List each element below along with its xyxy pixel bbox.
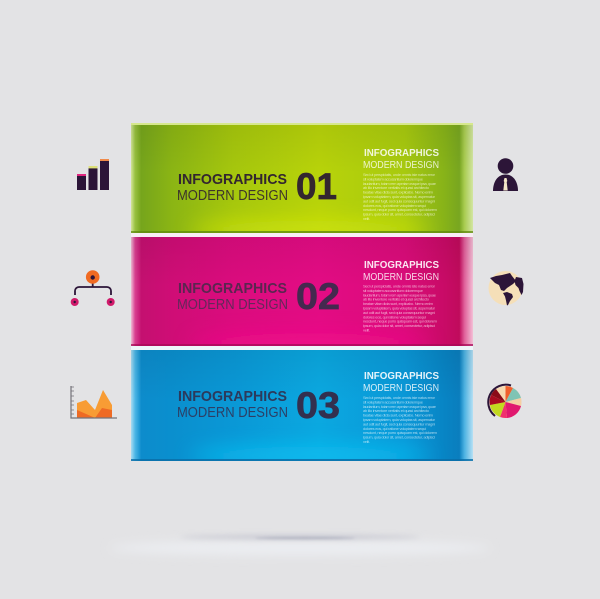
number 03: 03 <box>296 385 340 426</box>
body text 01: beatae vitae dicta sunt, explicabo. Nemo enim <box>363 190 434 195</box>
panel: green band 01 <box>131 123 473 240</box>
icon: network nodes <box>71 270 115 306</box>
body text 03 <box>363 395 438 444</box>
icon: businessman <box>493 158 518 191</box>
body text 02: dolores eos, qui ratione voluptatem sequi <box>363 314 426 319</box>
body text 03: nesciunt, neque porro quisquam est, qui dolorem <box>363 430 438 435</box>
body text 03: Sed ut perspiciatis, unde omnis iste natus error <box>363 395 436 400</box>
floor shadow <box>110 535 490 555</box>
subheading: modern design 01: MODERN DESIGN <box>177 187 288 204</box>
body text 01: sit voluptatem accusantium doloremque <box>363 176 424 181</box>
subheading: modern design 03: MODERN DESIGN <box>177 404 288 421</box>
body text 01: ipsam voluptatem, quia voluptas sit, aspernatur <box>363 194 436 199</box>
body text 02: aut odit aut fugit, sed quia consequuntur magni <box>363 310 435 315</box>
body text 01 <box>363 172 438 221</box>
number 02: 02 <box>296 276 340 317</box>
body text 03: ab illo inventore veritatis et quasi architecto <box>363 408 430 413</box>
body text 01: laudantium, totam rem aperiam eaque ipsa, quae <box>363 181 437 186</box>
body text 01: Sed ut perspiciatis, unde omnis iste natus error <box>363 172 436 177</box>
panel: magenta band 02 <box>131 233 473 353</box>
body text 01: nesciunt, neque porro quisquam est, qui dolorem <box>363 207 438 212</box>
icon: pie chart <box>488 385 522 418</box>
heading: infographics 02: INFOGRAPHICS <box>178 280 287 297</box>
icon: globe <box>488 271 524 306</box>
right heading 01: INFOGRAPHICS <box>364 148 439 159</box>
right subheading 03: MODERN DESIGN <box>363 382 439 394</box>
body text 03: aut odit aut fugit, sed quia consequuntur magni <box>363 421 435 426</box>
subheading: modern design 02: MODERN DESIGN <box>177 296 288 313</box>
number 01: 01 <box>296 166 337 207</box>
body text 02: ab illo inventore veritatis et quasi architecto <box>363 297 430 302</box>
heading: infographics 01: INFOGRAPHICS <box>178 171 287 188</box>
right subheading 01: MODERN DESIGN <box>363 159 439 171</box>
body text 03: sit voluptatem accusantium doloremque <box>363 399 424 404</box>
icon: area chart <box>71 386 117 418</box>
icon: bar chart <box>77 159 109 190</box>
body text 01: aut odit aut fugit, sed quia consequuntur magni <box>363 198 435 203</box>
right subheading 02: MODERN DESIGN <box>363 271 439 283</box>
body text 03: beatae vitae dicta sunt, explicabo. Nemo enim <box>363 413 434 418</box>
body text 02: ipsum, quia dolor sit, amet, consectetur, adipisci <box>363 323 435 328</box>
right heading 02: INFOGRAPHICS <box>364 260 439 271</box>
body text 02: nesciunt, neque porro quisquam est, qui dolorem <box>363 319 438 324</box>
body text 01: ipsum, quia dolor sit, amet, consectetur, adipisci <box>363 212 435 217</box>
body text 02: ipsam voluptatem, quia voluptas sit, aspernatur <box>363 306 436 310</box>
body text 02: sit voluptatem accusantium doloremque <box>363 288 424 293</box>
body text 01: ab illo inventore veritatis et quasi architecto <box>363 185 430 190</box>
body text 01: velit. <box>363 216 370 221</box>
body text 02: Sed ut perspiciatis, unde omnis iste natus error <box>363 284 436 288</box>
body text 03: ipsum, quia dolor sit, amet, consectetur, adipisci <box>363 435 435 440</box>
body text 03: ipsam voluptatem, quia voluptas sit, aspernatur <box>363 417 436 422</box>
body text 02: beatae vitae dicta sunt, explicabo. Nemo enim <box>363 301 434 306</box>
body text 03: dolores eos, qui ratione voluptatem sequi <box>363 426 426 431</box>
body text 02: velit. <box>363 328 370 332</box>
body text 02: laudantium, totam rem aperiam eaque ipsa, quae <box>363 292 437 297</box>
body text 02 <box>363 284 438 332</box>
body text 01: dolores eos, qui ratione voluptatem sequi <box>363 203 426 208</box>
heading: infographics 03: INFOGRAPHICS <box>178 388 287 405</box>
panel: blue band 03 <box>131 346 473 466</box>
right heading 03: INFOGRAPHICS <box>364 371 439 382</box>
body text 03: velit. <box>363 439 370 444</box>
body text 03: laudantium, totam rem aperiam eaque ipsa, quae <box>363 404 437 409</box>
